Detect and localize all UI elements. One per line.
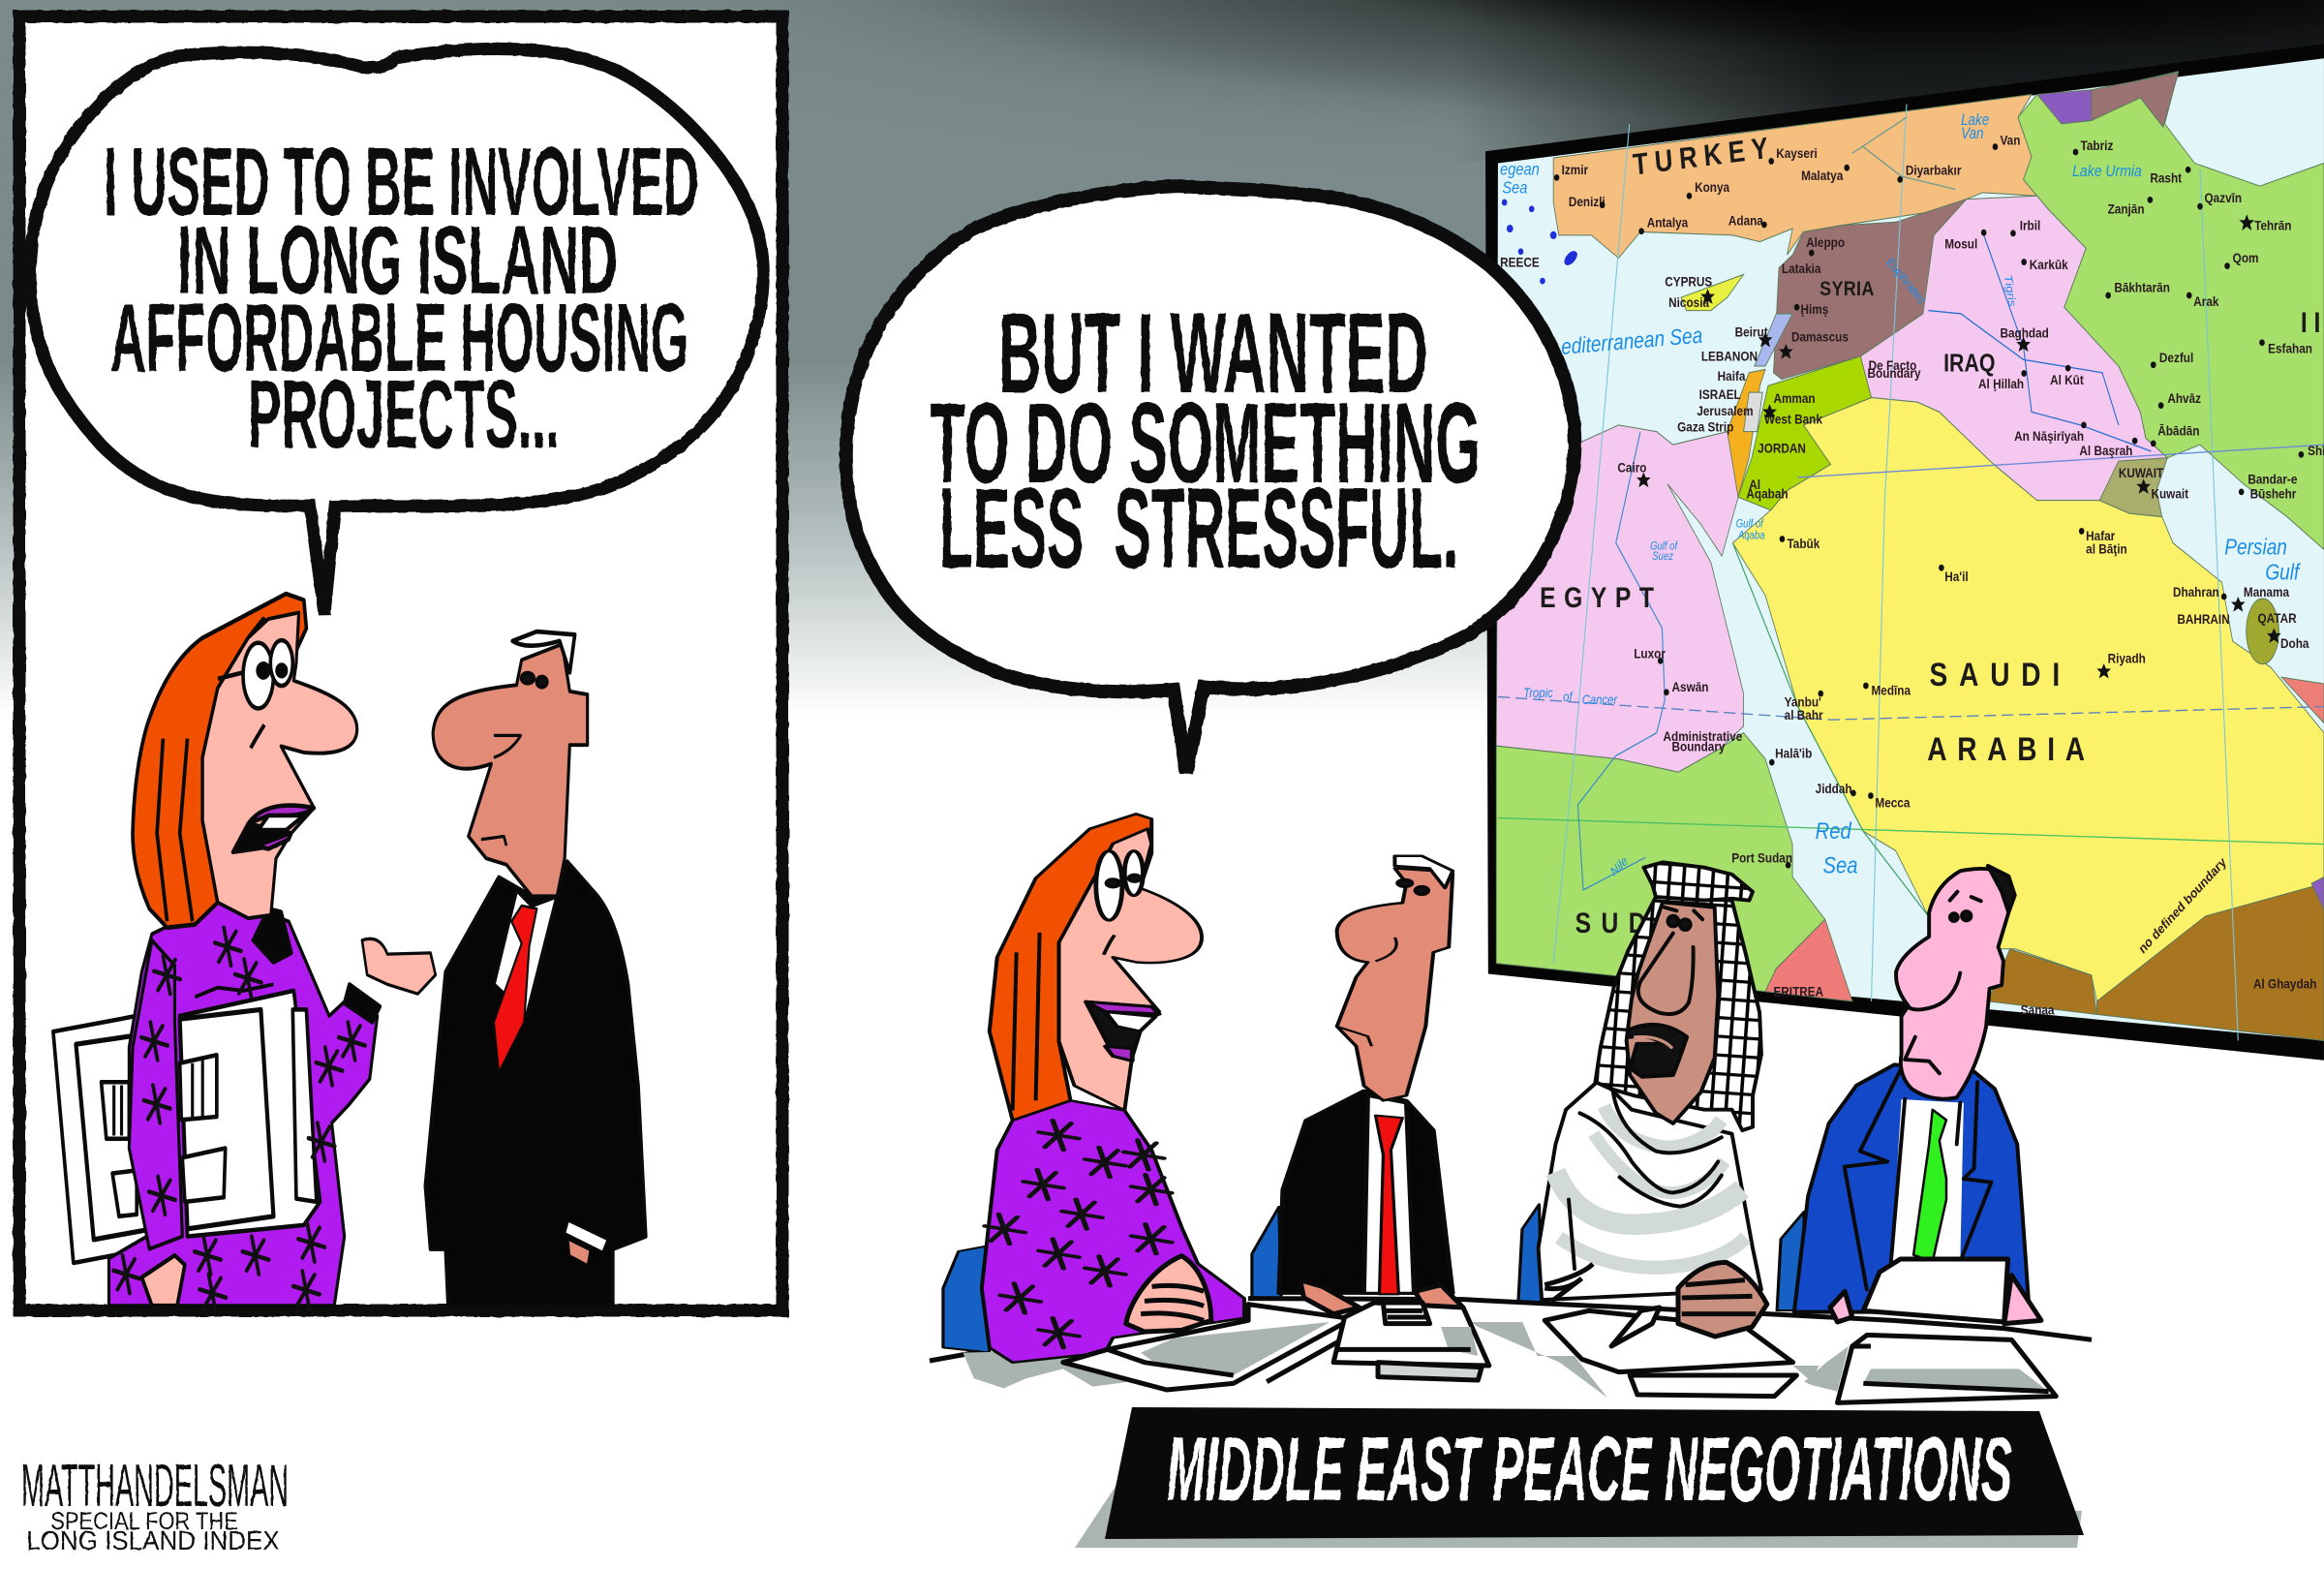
speech bubble: meeting	[846, 186, 1575, 773]
table top	[930, 1299, 2092, 1407]
map labels: CYPRUS	[1665, 274, 1713, 290]
panel: left cartoon frame	[19, 16, 782, 1310]
map labels: Manama	[2244, 584, 2290, 600]
map labels: Van	[2000, 132, 2020, 148]
map labels: Rasht	[2150, 170, 2183, 186]
map labels: IRAQ	[1943, 351, 1995, 378]
map labels: Al Kūt	[2050, 372, 2084, 387]
map labels: Halā'ib	[1775, 745, 1812, 761]
man suit at table	[1279, 856, 1452, 1294]
map labels: Qazvīn	[2204, 190, 2242, 205]
map labels: Aqaba	[1737, 530, 1765, 542]
map labels: Cairo	[1617, 460, 1647, 476]
sheikh robe	[1539, 1082, 1761, 1300]
map labels: Euphrates	[1884, 255, 1928, 307]
papers: woman	[1063, 1305, 1352, 1390]
map labels: De Facto	[1869, 357, 1916, 373]
papers: sheikh	[1544, 1310, 1796, 1397]
map labels: Red	[1816, 817, 1852, 845]
map labels: Nile	[1608, 853, 1631, 879]
map labels: Adana	[1728, 213, 1764, 229]
map labels: Aswān	[1672, 679, 1708, 694]
map labels: Al Başrah	[2079, 443, 2132, 458]
map labels: no defined boundary	[2136, 853, 2229, 957]
map labels: Ābādān	[2157, 423, 2199, 439]
map labels: Sea	[1502, 178, 1527, 198]
signature: LONG ISLAND INDEX	[26, 1527, 280, 1556]
map labels: Gulf	[2265, 561, 2301, 585]
speech text: left panel: PROJECTS...	[248, 360, 560, 469]
map labels: Dezful	[2159, 350, 2193, 365]
map islands	[1502, 200, 1579, 285]
scene: left panel characters	[53, 594, 646, 1312]
map labels: Sea	[1823, 852, 1857, 878]
map city markers	[1554, 143, 2304, 869]
map frame	[1485, 44, 2324, 1061]
map labels: Al Ḩillah	[1978, 376, 2024, 391]
map labels: Tabūk	[1787, 536, 1820, 551]
map labels: Karkūk	[2030, 257, 2068, 272]
map labels: KUWAIT	[2119, 465, 2163, 480]
map labels: Administrative	[1664, 728, 1742, 744]
map labels: SYRIA	[1819, 278, 1874, 300]
map labels: West Bank	[1764, 411, 1823, 427]
map labels: Doha	[2280, 635, 2309, 651]
map labels: TURKEY	[1632, 132, 1769, 182]
map labels: Boundary	[1672, 739, 1726, 754]
man hands	[1300, 1280, 1463, 1315]
portfolio	[53, 1016, 182, 1263]
map labels: ARABIA	[1927, 731, 2085, 768]
map labels: Tropic	[1523, 686, 1553, 700]
woman hair	[133, 594, 306, 928]
map labels: Tehrān	[2254, 217, 2292, 233]
map labels: Qom	[2233, 250, 2258, 265]
woman body	[108, 900, 436, 1312]
map labels: I I	[2301, 306, 2320, 338]
scene: chairs and man in black suit	[943, 856, 1804, 1353]
map labels: editerranean Sea	[1560, 323, 1703, 359]
map labels: ERITREA	[1773, 983, 1824, 1000]
map labels: Bandar-e	[2248, 472, 2297, 487]
papers: man	[1333, 1303, 1489, 1380]
map labels: Luxor	[1634, 646, 1666, 661]
map labels: SAUDI	[1930, 657, 2060, 693]
map labels: Mecca	[1875, 795, 1911, 811]
speech text: meeting: BUT I WANTED	[998, 290, 1428, 417]
map water	[1496, 58, 2324, 1040]
map labels: egean	[1500, 160, 1540, 179]
map labels: Irbil	[2020, 217, 2040, 233]
map labels: al Bahr	[1785, 707, 1823, 723]
map labels: Al	[1749, 477, 1760, 492]
man cuff and hand	[565, 1220, 608, 1265]
map labels: Riyadh	[2108, 650, 2146, 666]
speech text: left panel: AFFORDABLE HOUSING	[110, 284, 688, 392]
map labels: Diyarbakır	[1906, 163, 1961, 178]
map labels: Persian	[2224, 536, 2287, 560]
map labels: Boundary	[1868, 365, 1921, 381]
sheikh and man in blue suit	[1539, 862, 2030, 1312]
woman face	[202, 613, 357, 918]
map labels: Lake Urmia	[2072, 163, 2142, 180]
map labels: Port Sudan	[1731, 849, 1792, 866]
man suit	[425, 862, 646, 1306]
map labels: Nicosia	[1668, 294, 1710, 310]
speech text: left panel: I USED TO BE INVOLVED	[104, 128, 699, 236]
map labels: Būshehr	[2250, 486, 2296, 502]
map grid lines and rivers	[1498, 105, 2324, 1040]
map labels: Mosul	[1944, 235, 1977, 252]
map labels: Jiddah	[1816, 781, 1852, 796]
blue suit man	[1794, 866, 2030, 1312]
speech text: meeting: TO DO SOMETHING	[930, 380, 1481, 508]
map labels: Amman	[1773, 390, 1816, 406]
speech text: left panel	[104, 128, 699, 469]
sheikh face	[1627, 902, 1718, 1123]
map labels: Ḩimş	[1801, 301, 1828, 317]
man shirt and tie	[494, 890, 557, 1072]
woman glasses	[218, 640, 292, 748]
signature	[21, 1453, 289, 1556]
map labels: EGYPT	[1540, 581, 1654, 613]
speech text: left panel: IN LONG ISLAND	[177, 206, 618, 315]
map labels: Latakia	[1782, 261, 1821, 276]
map labels: Sanaa	[2021, 1001, 2055, 1018]
nameplate	[1075, 1407, 2084, 1548]
dress pattern	[985, 1121, 1172, 1347]
map labels: REECE	[1500, 254, 1540, 270]
map labels: Damascus	[1791, 328, 1849, 345]
map labels: Kuwait	[2151, 486, 2189, 502]
map labels: Ahvāz	[2167, 390, 2201, 406]
map labels: Ha'il	[1944, 569, 1969, 584]
woman at table	[982, 814, 1244, 1363]
speech text: meeting: LESS STRESSFUL.	[939, 465, 1458, 593]
map labels: ISRAEL	[1699, 386, 1741, 402]
map labels: Aleppo	[1806, 234, 1845, 250]
map labels: Gulf of	[1736, 518, 1764, 531]
map labels: Van	[1961, 126, 1984, 142]
map labels: of	[1563, 690, 1574, 704]
map labels: Haifa	[1718, 368, 1746, 384]
map labels: Al Ghaydah	[2253, 975, 2316, 992]
sheikh hands and pen	[1544, 1262, 1767, 1346]
hands and papers	[1063, 1256, 2056, 1402]
map labels: Esfahan	[2268, 340, 2312, 356]
chairs	[943, 1204, 1804, 1353]
signature: MATTHANDELSMAN	[21, 1453, 289, 1520]
map labels: Dhahran	[2173, 584, 2219, 600]
map labels: Baghdad	[2000, 324, 2049, 341]
map labels: QATAR	[2257, 610, 2297, 626]
map labels: Hafar	[2086, 528, 2115, 543]
table shadows	[963, 1322, 1849, 1398]
map labels: Medīna	[1871, 682, 1911, 698]
map labels: Aqabah	[1746, 486, 1789, 502]
signature: SPECIAL FOR THE	[50, 1508, 238, 1535]
map labels: Gaza Strip	[1677, 419, 1733, 435]
map labels: Gulf of	[1650, 540, 1678, 553]
map labels: Suez	[1652, 550, 1674, 563]
map labels: Arak	[2193, 293, 2219, 309]
map on the wall	[1485, 44, 2324, 1061]
map labels: Cancer	[1582, 692, 1618, 707]
man head	[433, 644, 588, 896]
map labels: al Bāţin	[2086, 540, 2127, 557]
map labels	[1500, 112, 2324, 1018]
woman hand	[1126, 1256, 1211, 1332]
map labels: Tigris	[2002, 274, 2019, 308]
map labels: SUD	[1575, 907, 1646, 938]
woman mouth	[233, 806, 314, 852]
speech text: meeting	[930, 290, 1481, 593]
speech bubble: left panel	[30, 48, 763, 614]
map labels: JORDAN	[1758, 440, 1806, 456]
map labels: Malatya	[1801, 168, 1844, 183]
map labels: Antalya	[1647, 215, 1689, 231]
map countries	[1496, 72, 2324, 1040]
map labels: Konya	[1695, 179, 1730, 195]
dress pattern	[113, 928, 365, 1312]
papers: blue suit man	[1830, 1259, 2056, 1402]
sheikh headdress	[1595, 897, 1761, 1130]
map labels: Bākhtarān	[2114, 280, 2170, 295]
map labels: Tabriz	[2081, 138, 2114, 153]
map labels: BAHRAIN	[2177, 611, 2230, 627]
map labels: Lake	[1961, 112, 1989, 130]
map labels: Jerusalem	[1697, 403, 1754, 418]
map labels: Yanbu'	[1785, 694, 1821, 710]
map labels: LEBANON	[1701, 349, 1758, 364]
map labels: Zanjān	[2108, 200, 2145, 217]
map labels: Denizli	[1569, 194, 1605, 209]
map labels: An Nāşirīyah	[2014, 428, 2084, 444]
map labels: Beirut	[1735, 324, 1768, 340]
map labels: Izmir	[1562, 162, 1588, 177]
map labels: Kayseri	[1776, 145, 1818, 161]
